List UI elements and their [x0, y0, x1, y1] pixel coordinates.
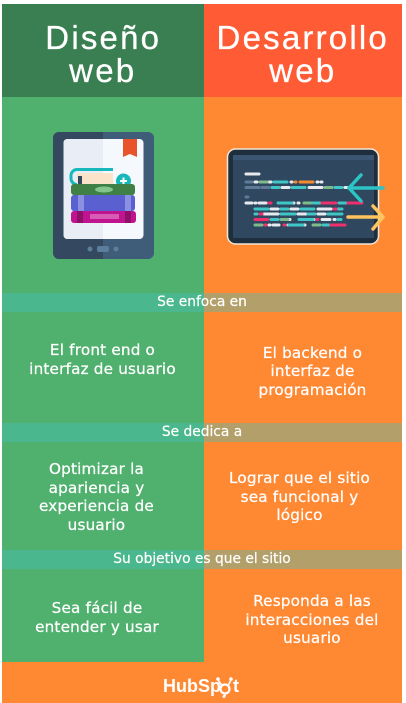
text: front end	[29, 340, 176, 378]
text: responda: interacciones del	[245, 610, 379, 628]
text: front end: El front end o	[50, 340, 155, 358]
text: optimizar: experiencia de	[39, 497, 154, 515]
logo: HubSpot: HubSp	[163, 676, 221, 696]
text: optimizar	[39, 460, 154, 534]
text: responda: Responda a las	[253, 592, 371, 610]
heading: Diseño web: Diseño	[45, 19, 161, 56]
text: lograr: lógico	[276, 506, 323, 524]
text: lograr: Lograr que el sitio	[229, 469, 370, 487]
text: lograr: sea funcional y	[241, 488, 358, 506]
text: responda	[245, 592, 379, 647]
heading: Desarrollo web: Desarrollo	[217, 19, 389, 56]
text: backend: El backend o	[263, 344, 362, 362]
text: optimizar: Optimizar la	[49, 460, 144, 478]
text: backend	[258, 344, 367, 398]
band: Se dedica a: Se dedica a	[162, 424, 242, 440]
band: Se enfoca en	[2, 293, 402, 312]
text: fácil: Sea fácil de	[52, 599, 142, 617]
band: Su objetivo	[2, 550, 402, 569]
text: backend: interfaz de	[270, 362, 355, 380]
text: responda: usuario	[283, 629, 341, 647]
band: Su objetivo: Su objetivo es que el sitio	[113, 551, 291, 567]
band: Se enfoca en: Se enfoca en	[157, 294, 247, 310]
text: front end: interfaz de usuario	[29, 360, 176, 378]
heading: Desarrollo web	[204, 4, 402, 97]
text: fácil	[35, 599, 159, 636]
heading: Diseño web: web	[69, 52, 136, 89]
text: optimizar: apariencia y	[49, 478, 144, 496]
text: lograr	[229, 469, 370, 524]
panel: green background	[2, 97, 204, 662]
text: backend: programación	[258, 380, 367, 398]
panel: orange background	[204, 97, 402, 703]
text: optimizar: usuario	[68, 516, 125, 534]
heading: Diseño web	[2, 4, 204, 97]
panel: bottom orange strip	[2, 662, 402, 703]
icon: code window with arrows	[226, 148, 385, 245]
logo: HubSpot: t	[233, 676, 239, 696]
heading: Desarrollo web: web	[269, 52, 336, 89]
text: fácil: entender y usar	[35, 618, 159, 636]
logo: HubSpot	[163, 676, 239, 698]
band: Se dedica a	[2, 423, 402, 442]
icon: tablet with books	[53, 132, 154, 259]
